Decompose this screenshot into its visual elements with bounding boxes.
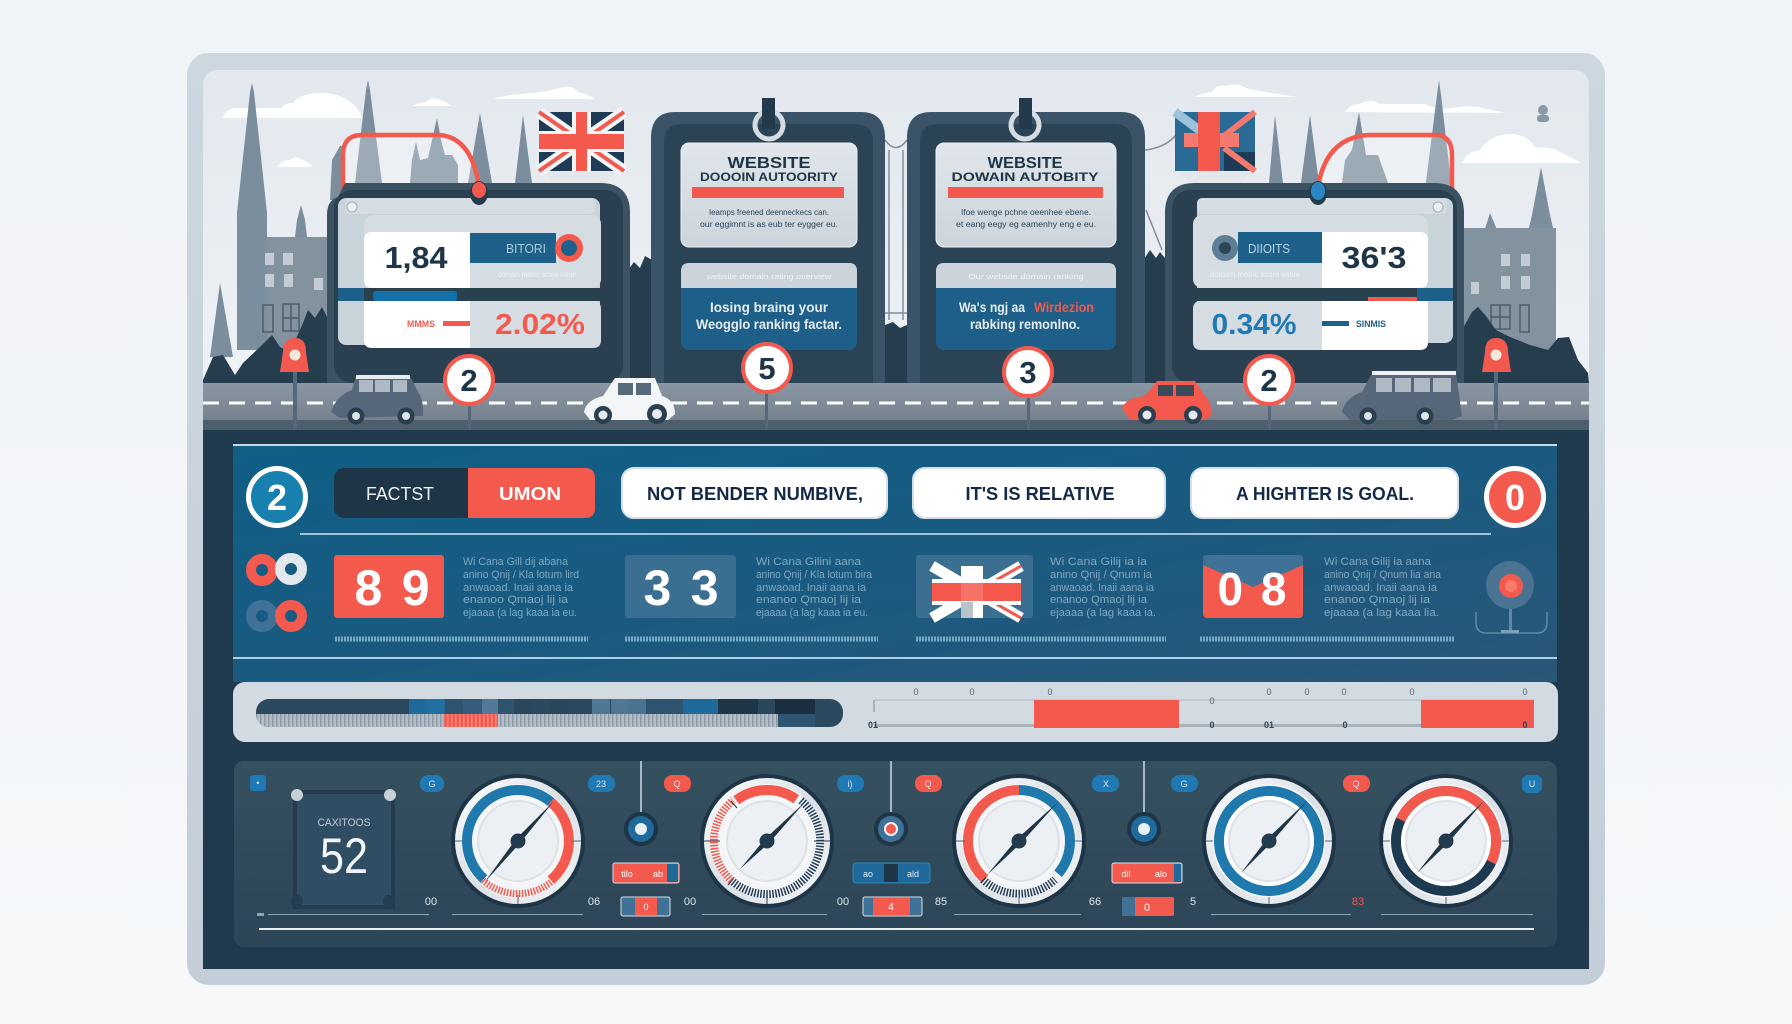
road sign: 3: 3 [1019, 355, 1037, 390]
stat row 2 [1193, 301, 1428, 350]
text block 3: enanoo Qmaoj lij ia [1050, 594, 1148, 606]
gauge 4 [1202, 774, 1336, 908]
stat row 1: BITORI [506, 241, 546, 256]
stat row 1 [364, 215, 601, 288]
stat row 2: 2.02% [495, 309, 585, 341]
road sign: 2 left [445, 356, 493, 430]
icon chips: U [1529, 779, 1535, 789]
info card: Our website domain ranking [968, 272, 1084, 281]
text block 2: Wi Cana Gilini aana [756, 556, 862, 568]
pendant 3 [1127, 761, 1161, 846]
stat tile: 0 8 [1203, 555, 1303, 618]
hanger [755, 98, 783, 139]
text block 1: enanoo Qmaoj lij ia [463, 594, 569, 606]
text block 4: ejaaaa (a lag kaaa lia. [1324, 607, 1439, 619]
stat tile: 8 9 [334, 555, 444, 618]
title card: DOWAIN AUTOBITY [952, 170, 1098, 184]
gauge value labels: 66 [1089, 896, 1101, 908]
lower tag 1: 0 [643, 902, 649, 912]
info card: Iosing braing your [710, 299, 829, 315]
badge: 2: 2 [267, 477, 287, 518]
info card: website domain rating overview [705, 272, 832, 281]
icon chips: X [1103, 779, 1109, 789]
text block 4: enanoo Qmaoj lij ia [1324, 594, 1431, 606]
road sign: 5 [743, 344, 791, 430]
scale chart: 0 [1342, 720, 1348, 730]
icon chips: Q [924, 779, 932, 789]
tag 3: dil [1121, 869, 1131, 879]
pill: not bender numbive: NOT BENDER NUMBIVE, [647, 484, 863, 504]
icon: union flag tile [916, 555, 1033, 618]
text block 3 [1050, 556, 1156, 619]
badge: 0 [1484, 466, 1546, 528]
pill: facts toggle: FACTST [366, 484, 434, 504]
gauge value labels: 85 [935, 896, 947, 908]
info card: Wirdezion [1034, 299, 1094, 315]
stat tile: 3 3: 3 3 [644, 560, 718, 616]
road sign: 2 left: 2 [460, 363, 478, 398]
scale chart: 01 [868, 720, 878, 730]
pill: facts toggle [334, 468, 595, 518]
icon chips: G [428, 779, 436, 789]
stat row 2 [364, 301, 601, 348]
panel: card 2 [651, 98, 885, 383]
red span 2 [1421, 700, 1534, 728]
panel: facts band [233, 444, 1557, 682]
gauge value labels [425, 896, 1364, 908]
stat row 1: DIIOITS [1248, 241, 1290, 256]
scale chart: 0 [1341, 687, 1347, 697]
tree lines between cards [628, 256, 652, 383]
icon: person top right [1537, 105, 1549, 122]
text block 4: anwaoad. Inaii aana ia [1324, 582, 1438, 594]
info card [681, 263, 857, 350]
stat row 2: SINMIS [1356, 319, 1386, 329]
stat tile: 3 3 [625, 555, 736, 618]
text block 1: Wi Cana Gill dij abana [463, 556, 569, 568]
text block 2: anwaoad. Inaii aana ia [756, 582, 867, 594]
hanger [1011, 98, 1039, 139]
outer frame [187, 53, 1605, 985]
icon chips: Q [1352, 779, 1360, 789]
title card: DOOOIN AUTOORITY [700, 170, 838, 184]
text block 4 [1324, 556, 1442, 619]
stat row 2: 0.34% [1212, 309, 1297, 341]
pendant 2 [874, 761, 908, 846]
icon: union flag left [539, 112, 624, 183]
dark base [203, 430, 1589, 969]
icon: white car [584, 378, 675, 424]
counter box: 52: 52 [320, 828, 368, 884]
stat row 1: domain metric score value [498, 270, 576, 279]
info card: rabking remonlno. [970, 316, 1080, 332]
skyline right [1269, 80, 1556, 240]
counter box: 52: CAXITOOS [318, 817, 370, 829]
scene: city skyline and road [203, 70, 1589, 969]
pendant 1 [624, 761, 658, 846]
title card: WEBSITE [728, 155, 811, 172]
icon: target beacon [1476, 561, 1547, 633]
bridge cables [885, 135, 1176, 320]
stat row 1: 36'3 [1342, 240, 1406, 275]
clouds left [223, 87, 594, 167]
badge: 0: 0 [1505, 477, 1525, 518]
text block 2: anino Qnij / Kla lotum bira [756, 569, 873, 581]
pill: not bender numbive [622, 468, 887, 518]
road sign: 2 right [1245, 356, 1293, 430]
gauge 1 [446, 769, 590, 913]
icon: red car [1122, 381, 1211, 424]
text block 2: enanoo Qmaoj lij ia [756, 594, 862, 606]
text block 3: anino Qnij / Qnum ia [1050, 569, 1153, 581]
text block 3: anwaoad. Inaii aana ia [1050, 582, 1155, 594]
icon chips: Q [673, 779, 681, 789]
icon chips: i) [848, 779, 852, 789]
gauge value labels: 06 [588, 896, 600, 908]
stat row 1 [1193, 215, 1428, 288]
skyline left [210, 80, 532, 357]
scale chart: 0 [913, 687, 919, 697]
icon chips: • [256, 778, 260, 788]
title card [936, 143, 1116, 247]
scale chart: 0 [1522, 687, 1528, 697]
road sign: 2 right: 2 [1260, 363, 1278, 398]
stat tile: 8 9: 8 9 [354, 560, 430, 616]
road [203, 383, 1589, 420]
lower tag 2: 4 [888, 902, 894, 913]
icon: lamp post left [280, 338, 309, 430]
scale chart: 0 [1209, 696, 1215, 706]
panel: gauges [234, 761, 1557, 947]
stat row 1: domain metric score value [1210, 270, 1301, 279]
icon chips [250, 775, 1542, 793]
scale chart: 0 [1409, 687, 1415, 697]
tag 2: ald [907, 869, 919, 879]
text block 2: ejaaaa (a lag kaaa ia eu. [756, 607, 868, 619]
pill: it's is relative: IT'S IS RELATIVE [966, 484, 1114, 504]
info card: Wa's ngj aa [959, 299, 1025, 315]
fine print 1 [335, 636, 588, 642]
gauge value labels: 5 [1190, 896, 1196, 908]
pill: a highter is goal [1191, 468, 1458, 518]
scale chart: 0 [1266, 687, 1272, 697]
handle red [343, 135, 479, 202]
text block 1: anino Qnij / Kla lotum lird [463, 569, 579, 581]
text block 1: ejaaaa (a lag kaaa ia eu. [463, 607, 577, 619]
road sign: 5: 5 [758, 351, 776, 386]
fine print 3 [916, 636, 1166, 642]
lower tag 1 [621, 897, 670, 916]
scale chart: 0 [1047, 687, 1053, 697]
icon chips: 23 [596, 779, 606, 789]
icon: van right [1342, 371, 1462, 424]
panel: timeline bar [233, 682, 1558, 742]
lower tag 2 [863, 897, 922, 916]
title card: et eang eegy eg eamenhy eng e eu. [956, 219, 1096, 229]
text block 3: Wi Cana Gilij ia ia [1050, 556, 1148, 568]
text block 4: anino Qnij / Qnum lia ana [1324, 569, 1442, 581]
knob red [470, 181, 488, 205]
scale chart: 0 [969, 687, 975, 697]
pill: a highter is goal: A HIGHTER IS GOAL. [1236, 484, 1414, 504]
title card: WEBSITE [988, 155, 1063, 172]
scale chart: 0 [1522, 720, 1528, 730]
stat row 2: MMMS [407, 319, 435, 329]
info card: Weogglo ranking factar. [696, 316, 842, 332]
scale chart: 0 [1209, 720, 1215, 730]
panel: card 1 [327, 135, 630, 383]
tag 3 [1112, 863, 1182, 883]
gauge 3 [947, 769, 1091, 913]
counter box: 52 [291, 789, 396, 907]
pill: it's is relative [913, 468, 1165, 518]
tree line left [203, 307, 340, 383]
tag 1 [613, 863, 679, 883]
text block 2 [756, 556, 873, 619]
tag 3: alo [1155, 869, 1167, 879]
icon chips: G [1180, 779, 1188, 789]
tag 1: ab [653, 869, 663, 879]
tag 2: ao [863, 869, 873, 879]
icon: union flag right [1175, 112, 1255, 183]
text block 4: Wi Cana Gilij ia aana [1324, 556, 1432, 568]
text block 3: ejaaaa (a lag kaaa ia. [1050, 607, 1156, 619]
segmented progress bar [256, 699, 843, 727]
scale chart [868, 687, 1534, 730]
fine print 2 [625, 636, 878, 642]
gauge value labels: 00 [684, 896, 696, 908]
clouds right [1195, 84, 1582, 163]
tag 2 [853, 863, 930, 883]
text block 1: anwaoad. Inaii aana ia [463, 582, 574, 594]
title card: our eggimnt is as eub ter eygger eu. [700, 219, 838, 229]
stat row 1: 1,84 [384, 240, 448, 275]
panel: card 3 [907, 98, 1145, 383]
info card [936, 263, 1116, 350]
title card: Ifoe wenge pchne oeenhee ebene. [961, 207, 1091, 217]
icon: rings [251, 558, 302, 627]
title card: Ieamps freened deenneckecs can. [709, 207, 829, 217]
pill: facts toggle: UMON [499, 484, 561, 504]
text block 1 [463, 556, 579, 619]
gauge value labels: 00 [837, 896, 849, 908]
icon: van left [331, 375, 423, 424]
title card [681, 143, 857, 247]
stat tile: 0 8: 0 8 [1218, 563, 1286, 615]
road sign: 3 [1004, 348, 1052, 430]
red span 1 [1034, 700, 1179, 728]
handle red [1318, 135, 1452, 205]
tree line right [1460, 307, 1589, 383]
knob blue [1309, 181, 1327, 205]
tag 1: tilo [621, 869, 633, 879]
gauge 5 [1379, 774, 1513, 908]
badge: 2 [246, 466, 308, 528]
gauge 2 [696, 770, 838, 912]
gauge value labels: 83 [1352, 896, 1364, 908]
panel: card 4 [1165, 135, 1464, 383]
icon: lamp post right [1482, 338, 1511, 430]
lower tag 3 [1122, 897, 1174, 916]
scale chart: 01 [1264, 720, 1274, 730]
lower tag 3: 0 [1144, 902, 1150, 914]
scale chart: 0 [1304, 687, 1310, 697]
fine print 4 [1200, 636, 1454, 642]
gauge value labels: 00 [425, 896, 437, 908]
